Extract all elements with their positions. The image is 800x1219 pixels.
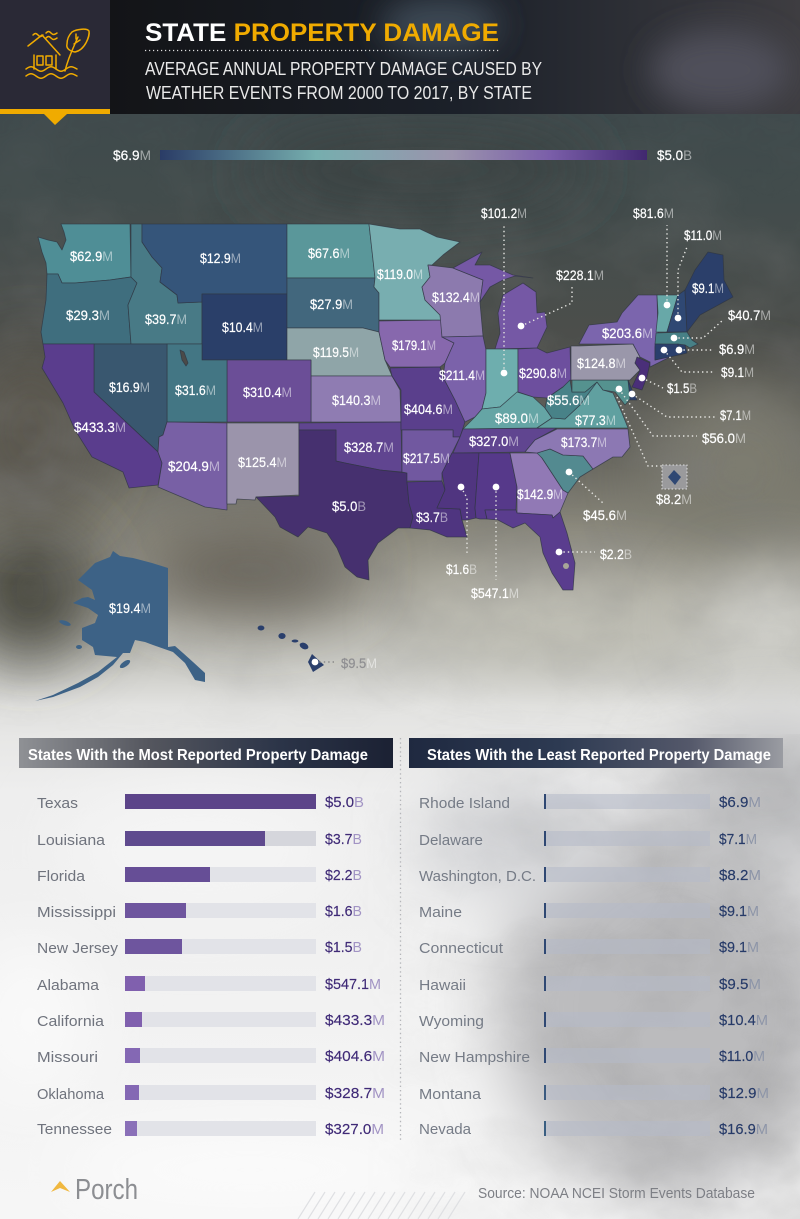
row: Washington, D.C.: Washington, D.C. [419, 868, 536, 885]
row: Wyoming [419, 1012, 768, 1030]
state: Oregon [41, 274, 137, 344]
lake: Okeechobee [563, 563, 569, 569]
state: Arizona [158, 422, 227, 510]
row: Alabama: $547.1M [325, 976, 381, 993]
row: Nevada: $16.9M [719, 1121, 768, 1138]
state: California [42, 344, 162, 488]
heading: most [19, 738, 393, 768]
legend: colour scale: $5.0B [657, 147, 692, 163]
state: Kentucky [463, 392, 552, 429]
map: Alaska [35, 551, 205, 701]
state: Virginia [537, 382, 628, 428]
state: New Mexico [227, 423, 299, 504]
lake: Great Salt Lake [180, 350, 188, 366]
row: Maine: $9.1M [719, 903, 759, 920]
state: Tennessee [453, 428, 557, 453]
row: New Jersey: New Jersey [37, 940, 119, 957]
logo: Porch [51, 1174, 138, 1206]
row: Florida: Florida [37, 868, 86, 885]
state: North Carolina [525, 429, 630, 469]
map value labels: $55.6M [547, 393, 590, 408]
map value labels: $8.2M [656, 492, 692, 507]
map value labels: $2.2B [600, 547, 632, 562]
row: Louisiana: Louisiana [37, 832, 106, 849]
state: Utah [167, 344, 227, 422]
row: California: $433.3M [325, 1012, 385, 1029]
map value labels: $125.4M [238, 455, 287, 470]
row: Nevada [419, 1121, 768, 1138]
map value labels: $290.8M [519, 366, 567, 381]
row: New Jersey [37, 939, 362, 957]
state: Maine [685, 252, 733, 332]
panel: least reported property damage [409, 738, 783, 1138]
map value labels: $433.3M [74, 420, 126, 435]
footer hatch pattern [298, 1192, 465, 1219]
state: Delaware [628, 380, 637, 400]
map value labels: $7.1M [720, 408, 751, 423]
state: Texas [256, 430, 413, 580]
map value labels: $45.6M [583, 508, 627, 523]
row: Mississippi: Mississippi [37, 904, 116, 921]
row: Wyoming: $10.4M [719, 1012, 768, 1029]
row: Montana: Montana [419, 1086, 482, 1103]
row: New Hampshire: New Hampshire [419, 1049, 530, 1066]
map value labels: $310.4M [243, 385, 292, 400]
row: Tennessee [37, 1121, 384, 1138]
map value labels: $39.7M [145, 312, 187, 327]
row: Alabama: Alabama [37, 977, 100, 994]
icon: flooded house and tree [26, 29, 89, 78]
map: Hawaii [258, 626, 324, 672]
row: Delaware: Delaware [419, 832, 483, 849]
row: Connecticut [419, 939, 759, 957]
leader lines [315, 225, 723, 662]
row: Louisiana [37, 831, 362, 849]
map value labels: $1.6B [446, 562, 477, 577]
row: Wyoming: Wyoming [419, 1013, 484, 1030]
state: Arkansas [402, 430, 460, 481]
title divider [145, 50, 501, 52]
map value labels: $9.1M [692, 281, 724, 296]
map value labels: $5.0B [332, 499, 366, 514]
island: Kodiak [119, 658, 131, 670]
state: Kansas [311, 376, 401, 422]
header band [110, 0, 800, 114]
row: Texas: $5.0B [325, 794, 364, 811]
row: New Hampshire: $11.0M [719, 1048, 765, 1065]
map value labels: $62.9M [70, 249, 113, 264]
row: Texas: Texas [37, 795, 78, 812]
row: Hawaii: $9.5M [719, 976, 761, 993]
map value labels: $327.0M [469, 434, 519, 449]
source: Source: NOAA NCEI Storm Events Database [478, 1186, 755, 1202]
map value labels: $1.5B [667, 381, 697, 396]
logo: Porch: Porch [75, 1174, 138, 1206]
row: Mississippi [37, 903, 362, 921]
map value labels: $203.6M [602, 326, 653, 341]
state: Nebraska [287, 328, 392, 376]
state: Illinois [442, 336, 486, 422]
state: Minnesota [369, 224, 460, 320]
row: Oklahoma: $328.7M [325, 1085, 385, 1102]
row: California: California [37, 1013, 105, 1030]
row: Maine: Maine [419, 904, 462, 921]
state: Indiana [482, 349, 518, 409]
state: Rhode Island [678, 344, 687, 355]
state: Colorado [227, 360, 311, 422]
row: Missouri [37, 1048, 385, 1066]
state: Louisiana [407, 481, 467, 537]
icon block with flood icon [0, 0, 110, 125]
heading: least: States With the Least Reported Property Damage [427, 747, 771, 764]
row: Connecticut: $9.1M [719, 939, 759, 956]
map value labels: $119.0M [377, 267, 423, 282]
row: Montana: $12.9M [719, 1085, 769, 1102]
map value labels: $67.6M [308, 246, 350, 261]
row: Connecticut: Connecticut [419, 940, 504, 957]
map value labels: $179.1M [392, 338, 436, 353]
map value labels: $204.9M [168, 459, 220, 474]
state: Pennsylvania [571, 344, 640, 380]
map value labels: $132.4M [432, 290, 480, 305]
leader dots [312, 302, 682, 665]
state: Montana [142, 224, 287, 303]
map value labels: $12.9M [200, 251, 241, 266]
row: Mississippi: $1.6B [325, 903, 362, 920]
map value labels: $101.2M [481, 206, 527, 221]
row: Hawaii [419, 976, 761, 994]
state: Wisconsin [422, 265, 483, 337]
row: Delaware: $7.1M [719, 831, 757, 848]
heading: most: States With the Most Reported Property Damage [28, 747, 368, 764]
row: Rhode Island: $6.9M [719, 794, 761, 811]
legend: colour scale [113, 147, 692, 163]
map value labels: $217.5M [403, 451, 450, 466]
map value labels: $140.3M [332, 393, 381, 408]
map value labels: $89.0M [495, 411, 539, 426]
row: California [37, 1012, 385, 1030]
map value labels: $6.9M [719, 342, 755, 357]
subtitle: WEATHER EVENTS FROM 2000 TO 2017, BY STATE [146, 83, 532, 103]
map value labels: $3.7B [416, 510, 448, 525]
map value labels: $29.3M [66, 308, 110, 323]
map value labels: $11.0M [684, 228, 722, 243]
map value labels: $56.0M [702, 431, 746, 446]
row: Rhode Island: Rhode Island [419, 795, 510, 812]
row: Louisiana: $3.7B [325, 831, 362, 848]
map value labels: $211.4M [439, 368, 485, 383]
row: Tennessee: $327.0M [325, 1121, 384, 1138]
subtitle: AVERAGE ANNUAL PROPERTY DAMAGE CAUSED BY [145, 59, 542, 79]
state: Maryland [572, 380, 631, 405]
row: Missouri: Missouri [37, 1049, 98, 1066]
row: Missouri: $404.6M [325, 1048, 385, 1065]
state: Georgia [510, 453, 568, 518]
map value labels: $228.1M [556, 268, 604, 283]
row: Texas [37, 794, 364, 812]
row: Alabama [37, 976, 381, 994]
row: Washington, D.C.: $8.2M [719, 867, 761, 884]
state: New York [579, 295, 672, 367]
island: Nunivak [76, 645, 82, 649]
state: Oklahoma [299, 422, 402, 472]
state: Mississippi [437, 453, 479, 520]
row: New Jersey: $1.5B [325, 939, 362, 956]
map value labels: $119.5M [313, 345, 359, 360]
map value labels: $547.1M [471, 586, 519, 601]
island: St Lawrence [59, 619, 71, 627]
panel: most reported property damage [19, 738, 393, 1138]
map value labels: $173.7M [561, 435, 607, 450]
map value labels: $16.9M [109, 380, 150, 395]
state: Michigan upper peninsula [453, 252, 533, 302]
state: Florida [485, 510, 575, 590]
row: Hawaii: Hawaii [419, 977, 466, 994]
map: contiguous US states [38, 224, 733, 590]
row: New Hampshire [419, 1048, 765, 1066]
row: Florida [37, 867, 362, 885]
map value labels: $124.8M [577, 356, 626, 371]
row: Delaware [419, 831, 757, 849]
map value labels: $81.6M [633, 206, 674, 221]
inset: Washington, D.C. [662, 465, 687, 489]
map value labels: $31.6M [175, 383, 216, 398]
row: Maine [419, 903, 759, 921]
map value labels: $77.3M [575, 413, 616, 428]
state: Nevada [94, 344, 167, 452]
state: Ohio [518, 347, 571, 398]
state: New Hampshire [667, 290, 687, 332]
map value labels: $10.4M [222, 320, 263, 335]
map value labels: $9.1M [721, 365, 754, 380]
map value labels: $404.6M [404, 402, 453, 417]
row: Oklahoma [37, 1085, 385, 1103]
state: Iowa [379, 320, 454, 367]
row: Nevada: Nevada [419, 1121, 472, 1138]
row: Florida: $2.2B [325, 867, 362, 884]
map value labels: $142.9M [517, 487, 563, 502]
map value labels: $9.5M [341, 656, 377, 671]
subtitle [145, 59, 542, 103]
state: Vermont [656, 295, 678, 332]
state: Idaho [128, 224, 202, 344]
state: South Dakota [287, 278, 379, 332]
map value labels: $27.9M [310, 297, 353, 312]
heading: least [409, 738, 783, 768]
state: Alabama [475, 453, 517, 519]
map value labels: $40.7M [728, 308, 771, 323]
state: New Jersey [632, 357, 650, 390]
map value labels: $19.4M [109, 601, 151, 616]
state: Wyoming [202, 294, 287, 360]
title: STATE PROPERTY DAMAGE [145, 19, 499, 47]
row: Oklahoma: Oklahoma [37, 1086, 105, 1103]
row: Washington, D.C. [419, 867, 761, 885]
state: Missouri [390, 367, 465, 437]
state: Massachusetts [655, 332, 698, 348]
state: West Virginia [545, 380, 597, 419]
state: Washington [38, 224, 131, 283]
legend: colour scale: $6.9M [113, 147, 151, 163]
column divider [400, 738, 402, 1140]
map value labels [66, 206, 771, 671]
state: Michigan lower peninsula [495, 283, 547, 349]
row: Tennessee: Tennessee [37, 1121, 112, 1138]
state: South Carolina [537, 449, 593, 493]
row: Montana [419, 1085, 769, 1103]
row: Rhode Island [419, 794, 761, 812]
state: North Dakota [287, 224, 375, 278]
state: Connecticut [655, 344, 679, 360]
map value labels: $328.7M [344, 440, 394, 455]
